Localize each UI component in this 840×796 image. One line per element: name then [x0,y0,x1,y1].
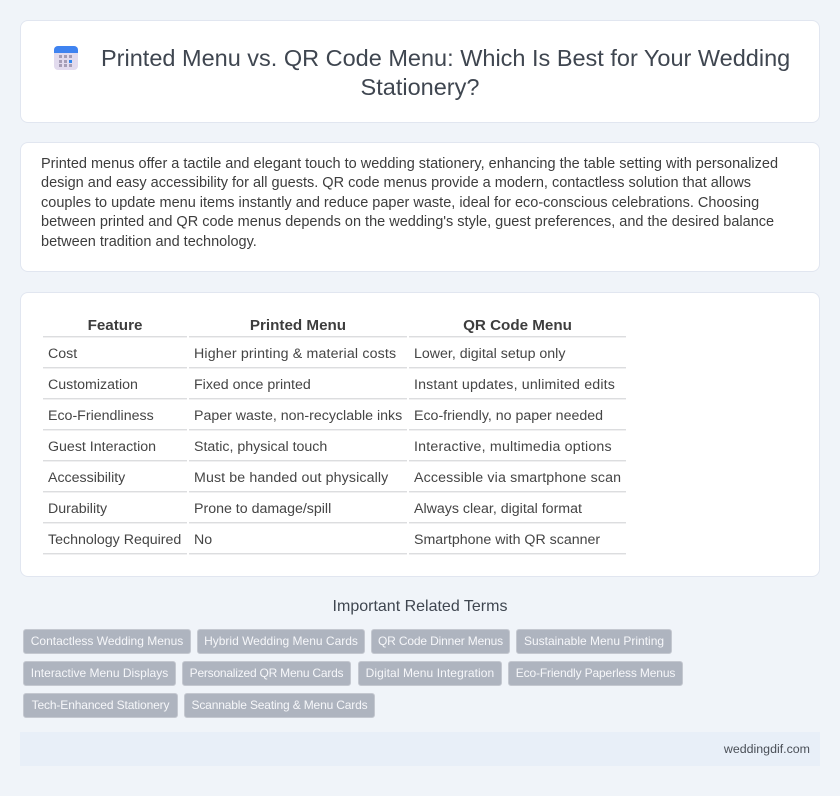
comparison table: Interactive, multimedia options [414,439,612,455]
tag: Contactless Wedding Menus [31,634,183,648]
comparison table: Instant updates, unlimited edits [414,377,615,393]
comparison table: Technology Required [48,532,181,548]
intro paragraph [41,156,778,250]
table header: Printed Menu: Printed Menu [250,317,346,334]
comparison table: Accessibility [48,470,125,486]
comparison table: Eco-Friendliness [48,408,154,424]
tag [23,693,178,718]
comparison table: Higher printing & material costs [194,346,396,362]
title: Printed Menu vs. QR Code Menu: Which Is Best for Your Wedding [101,45,790,71]
comparison table: Fixed once printed [194,377,311,393]
table header: Feature: Feature [88,317,142,334]
tag [508,661,683,686]
title: Stationery? [361,74,479,100]
icon: calendar menu [54,46,78,70]
tag: Scannable Seating & Menu Cards [192,698,367,712]
table header: QR Code Menu: QR Code Menu [463,317,572,334]
comparison table: Guest Interaction [48,439,156,455]
panel: intro text [20,142,820,272]
intro paragraph: design and easy accessibility for all guests. QR code menus provide a modern, contactless solution that allows [41,175,751,191]
comparison table: Accessible via smartphone scan [414,470,621,486]
tag: Hybrid Wedding Menu Cards [204,634,358,648]
intro paragraph: between tradition and technology. [41,234,257,250]
intro paragraph: Printed menus offer a tactile and elegant touch to wedding stationery, enhancing the table setting with personalized [41,156,778,172]
tag: Digital Menu Integration [366,666,494,680]
intro paragraph: couples to update menu items instantly and reduce paper waste, ideal for eco-conscious celebrations. Choosing [41,195,759,211]
tag [371,629,510,654]
heading: related terms: Important Related Terms [333,598,507,615]
comparison table: No [194,532,212,548]
tag [197,629,365,654]
tag [23,661,176,686]
tag: Tech-Enhanced Stationery [32,698,169,712]
comparison table: Cost [48,346,77,362]
comparison table: Lower, digital setup only [414,346,565,362]
comparison table [43,317,626,555]
tag [23,629,191,654]
tag: Eco-Friendly Paperless Menus [516,666,675,680]
tag: QR Code Dinner Menus [378,634,503,648]
tag [516,629,672,654]
footer source text: weddingdif.com [724,742,810,756]
title [101,45,790,100]
panel: comparison table [20,292,820,577]
comparison table: Always clear, digital format [414,501,582,517]
comparison table: Static, physical touch [194,439,327,455]
tag: Interactive Menu Displays [31,666,168,680]
comparison table: Durability [48,501,107,517]
panel: title header [20,20,820,123]
tag [182,661,351,686]
comparison table: Paper waste, non-recyclable inks [194,408,402,424]
intro paragraph: between printed and QR code menus depends on the wedding's style, guest preferences, and the desired balance [41,214,774,230]
related term tags [23,629,683,718]
tag: Personalized QR Menu Cards [190,666,343,680]
footer bar [20,732,820,766]
tag: Sustainable Menu Printing [524,634,664,648]
comparison table: Eco-friendly, no paper needed [414,408,603,424]
comparison table: Prone to damage/spill [194,501,331,517]
comparison table: Must be handed out physically [194,470,388,486]
comparison table: Customization [48,377,138,393]
tag [184,693,375,718]
comparison table: Smartphone with QR scanner [414,532,600,548]
tag [358,661,502,686]
